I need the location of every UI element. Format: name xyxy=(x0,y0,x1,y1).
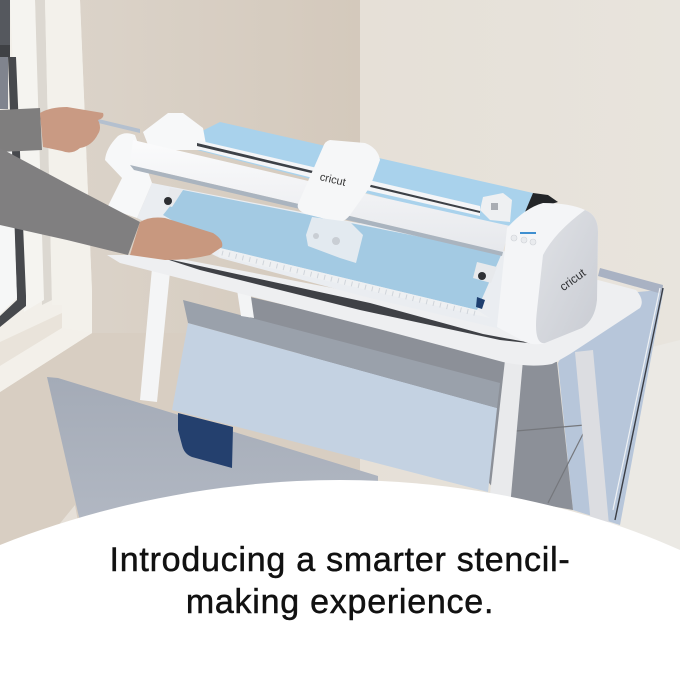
storage bag top band xyxy=(183,300,500,408)
table legs xyxy=(140,268,609,530)
white curved panel xyxy=(0,480,680,680)
rear right bracket xyxy=(480,193,512,222)
pen xyxy=(90,117,140,133)
back hand xyxy=(40,107,103,152)
black roll xyxy=(525,193,558,212)
right mat roller xyxy=(473,262,497,283)
dark base xyxy=(163,258,537,344)
front hand xyxy=(130,218,222,260)
housing logo: cricut xyxy=(557,265,589,294)
cutting machine xyxy=(105,113,598,344)
carriage xyxy=(298,140,380,222)
storage bag light panel xyxy=(172,323,497,492)
rear left block xyxy=(143,113,207,150)
housing buttons xyxy=(511,235,536,245)
slot strip xyxy=(197,140,480,216)
ruler xyxy=(218,248,490,318)
headline: making experience. xyxy=(186,582,494,620)
table top xyxy=(107,255,642,366)
headline: Introducing a smarter stencil- xyxy=(110,541,570,579)
storage bag back panel xyxy=(250,297,573,510)
main beam xyxy=(130,140,510,252)
storage bag side panel right xyxy=(558,268,664,525)
right end housing xyxy=(497,203,598,344)
storage bag front panel xyxy=(47,377,378,540)
blue mat back xyxy=(197,122,533,235)
window xyxy=(0,0,92,392)
left end cap xyxy=(105,133,152,218)
mat clip xyxy=(476,297,485,309)
carriage head xyxy=(306,217,363,263)
mat front xyxy=(163,190,502,310)
navy bag tab xyxy=(178,413,233,468)
deck xyxy=(137,183,508,330)
back sleeve xyxy=(0,108,42,152)
rods xyxy=(516,425,586,503)
housing side panel xyxy=(536,210,598,343)
headline xyxy=(110,541,570,620)
left mat roller xyxy=(165,188,183,207)
front sleeve xyxy=(0,148,140,255)
housing indicator xyxy=(520,232,536,234)
carriage logo: cricut xyxy=(319,171,347,189)
